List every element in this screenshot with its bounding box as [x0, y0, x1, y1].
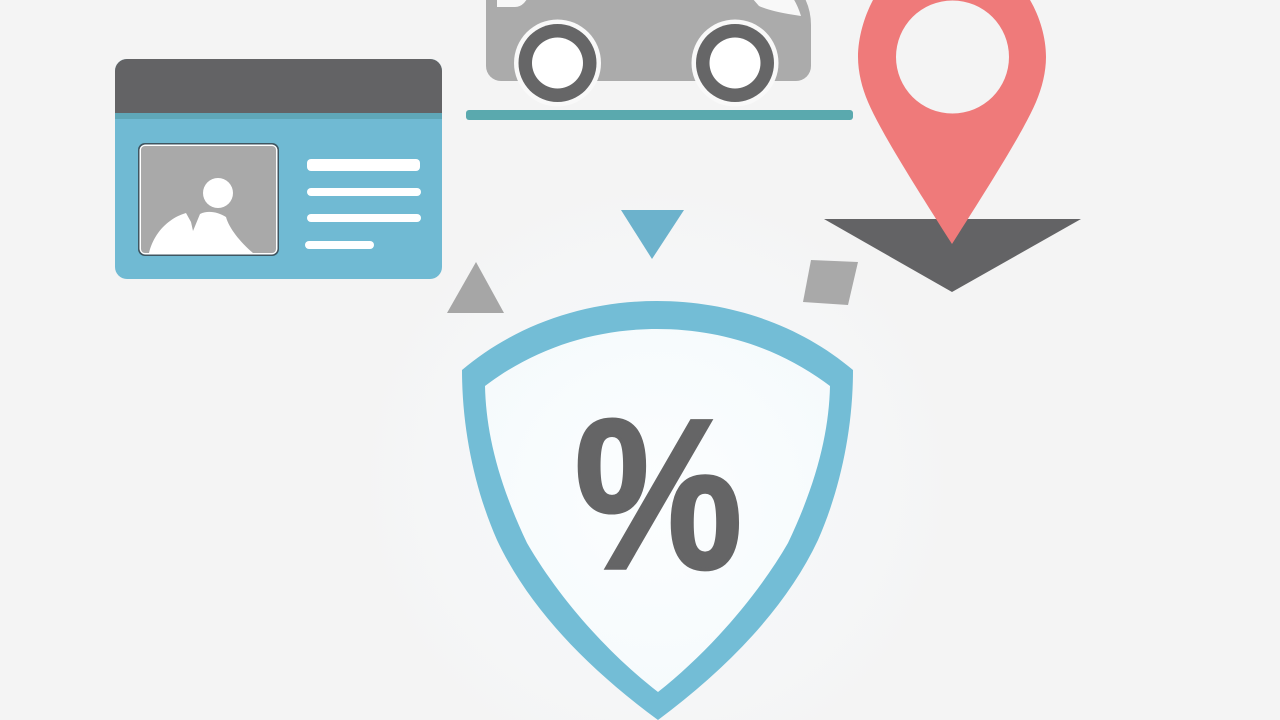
blue triangle [621, 210, 684, 259]
ID photo [138, 143, 279, 256]
car windows [497, 0, 801, 16]
shield with percent [462, 301, 853, 720]
percent sign: % [574, 374, 743, 614]
pin base arrow [824, 219, 1081, 292]
icon: ID card [115, 59, 442, 279]
grey triangle [447, 262, 504, 313]
front wheel [514, 20, 601, 106]
icon: car [486, 0, 811, 106]
road line [466, 110, 853, 120]
icon: location pin [824, 0, 1081, 292]
grey square [803, 260, 858, 305]
ID text lines [305, 159, 421, 249]
rear wheel [692, 20, 778, 106]
